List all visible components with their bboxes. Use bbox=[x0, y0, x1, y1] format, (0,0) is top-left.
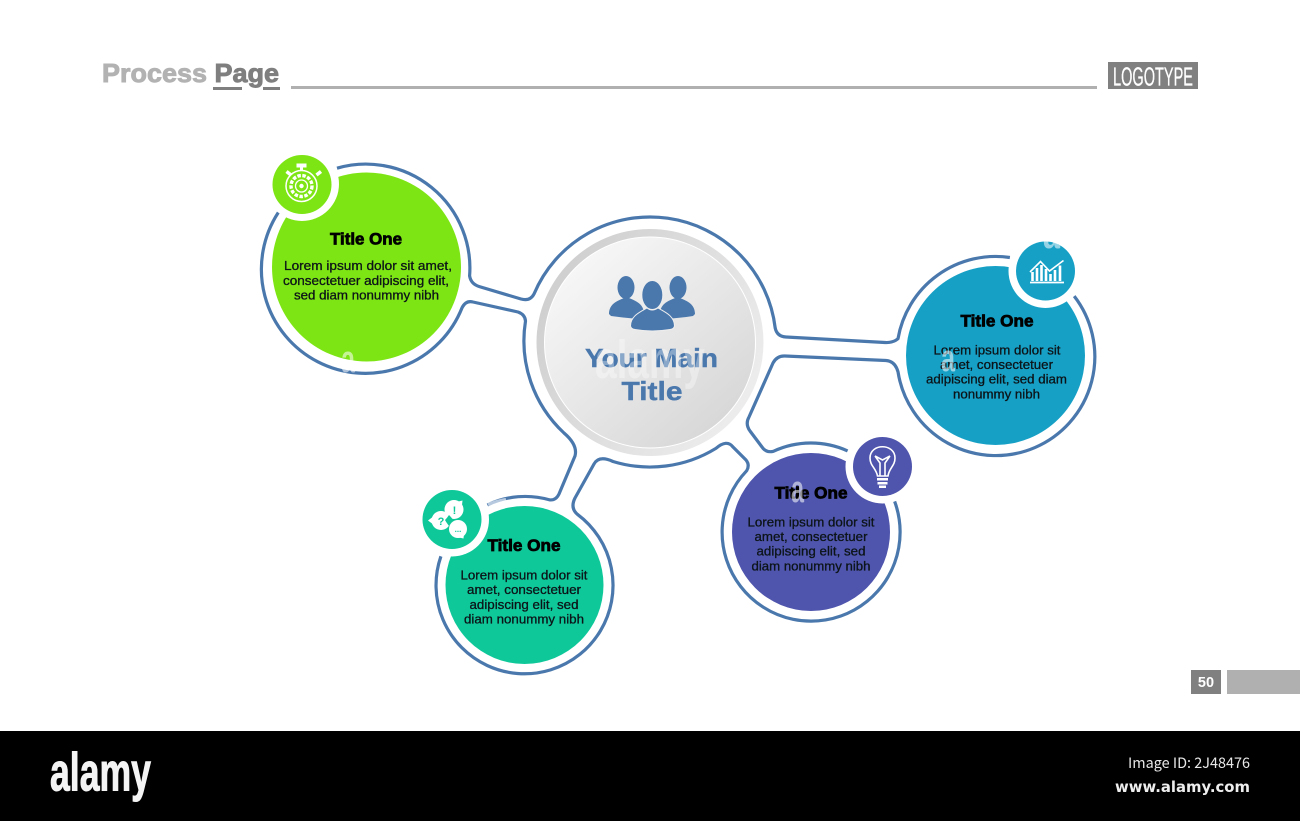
icon: speech bubbles: ? bbox=[438, 516, 445, 528]
image id: Image ID: 2J48476 bbox=[1128, 752, 1250, 773]
page header bbox=[102, 58, 1198, 92]
title: Title One bbox=[960, 312, 1034, 330]
panel: central hub bbox=[536, 229, 764, 456]
body text: nonummy nibh bbox=[953, 386, 1040, 402]
panel: teal topic bbox=[415, 482, 604, 664]
connected outline network bbox=[261, 164, 1095, 674]
body text: diam nonummy nibh bbox=[464, 612, 584, 626]
panel: purple topic bbox=[732, 430, 920, 611]
body text: amet, consectetuer bbox=[467, 582, 582, 597]
faint watermark: alamy bbox=[595, 330, 705, 390]
body text: Lorem ipsum dolor sit bbox=[748, 514, 875, 530]
body text: amet, consectetuer bbox=[754, 529, 868, 544]
alamy wordmark: alamy bbox=[50, 742, 151, 802]
icon: growth chart bbox=[1030, 260, 1064, 282]
icon: stopwatch gear bbox=[286, 164, 321, 202]
body text: diam nonummy nibh bbox=[752, 558, 870, 574]
panel: green topic bbox=[265, 147, 461, 362]
page number badge: 50 bbox=[1198, 675, 1214, 691]
icon: speech bubbles: ... bbox=[455, 525, 461, 534]
panel: blue topic bbox=[906, 234, 1085, 445]
body text: adipiscing elit, sed bbox=[470, 597, 578, 612]
icon: light bulb bbox=[870, 447, 895, 488]
body text: consectetuer adipiscing elit, bbox=[283, 273, 449, 288]
main title bbox=[585, 343, 718, 406]
black credit band bbox=[0, 731, 1300, 821]
title: Title One bbox=[774, 484, 848, 502]
logotype badge: LOGOTYPE bbox=[1113, 62, 1193, 92]
body text bbox=[748, 514, 875, 574]
icon: team of people bbox=[609, 276, 695, 331]
small watermark marks bbox=[341, 215, 1061, 511]
body text bbox=[283, 258, 452, 302]
body text: Lorem ipsum dolor sit bbox=[460, 568, 588, 582]
small watermark marks: a bbox=[941, 338, 956, 380]
heading: Process Page: Process Page bbox=[102, 58, 279, 88]
body text: adipiscing elit, sed bbox=[756, 544, 866, 558]
body text: adipiscing elit, sed diam bbox=[926, 372, 1067, 386]
title: Title One bbox=[488, 537, 560, 555]
main title: Title bbox=[622, 376, 682, 406]
logotype badge bbox=[1108, 62, 1198, 92]
footer bar bbox=[1227, 670, 1300, 694]
website: www.alamy.com bbox=[1115, 778, 1250, 796]
header rule bbox=[291, 86, 1097, 89]
icon: speech bubbles: ! bbox=[453, 505, 456, 517]
body text: Lorem ipsum dolor sit bbox=[934, 342, 1061, 358]
body text bbox=[460, 568, 588, 626]
small watermark marks: a bbox=[791, 469, 805, 511]
body text bbox=[926, 342, 1067, 402]
title: Title One bbox=[330, 230, 402, 248]
page number badge bbox=[1191, 670, 1221, 694]
heading underline bbox=[213, 87, 280, 90]
body text: sed diam nonummy nibh bbox=[294, 288, 439, 302]
body text: Lorem ipsum dolor sit amet, bbox=[284, 258, 452, 273]
small watermark marks: a bbox=[1043, 215, 1061, 257]
icon: speech bubbles bbox=[428, 500, 467, 538]
body text: amet, consectetuer bbox=[940, 357, 1054, 372]
small watermark marks: a bbox=[341, 339, 356, 381]
main title: Your Main bbox=[585, 343, 718, 373]
